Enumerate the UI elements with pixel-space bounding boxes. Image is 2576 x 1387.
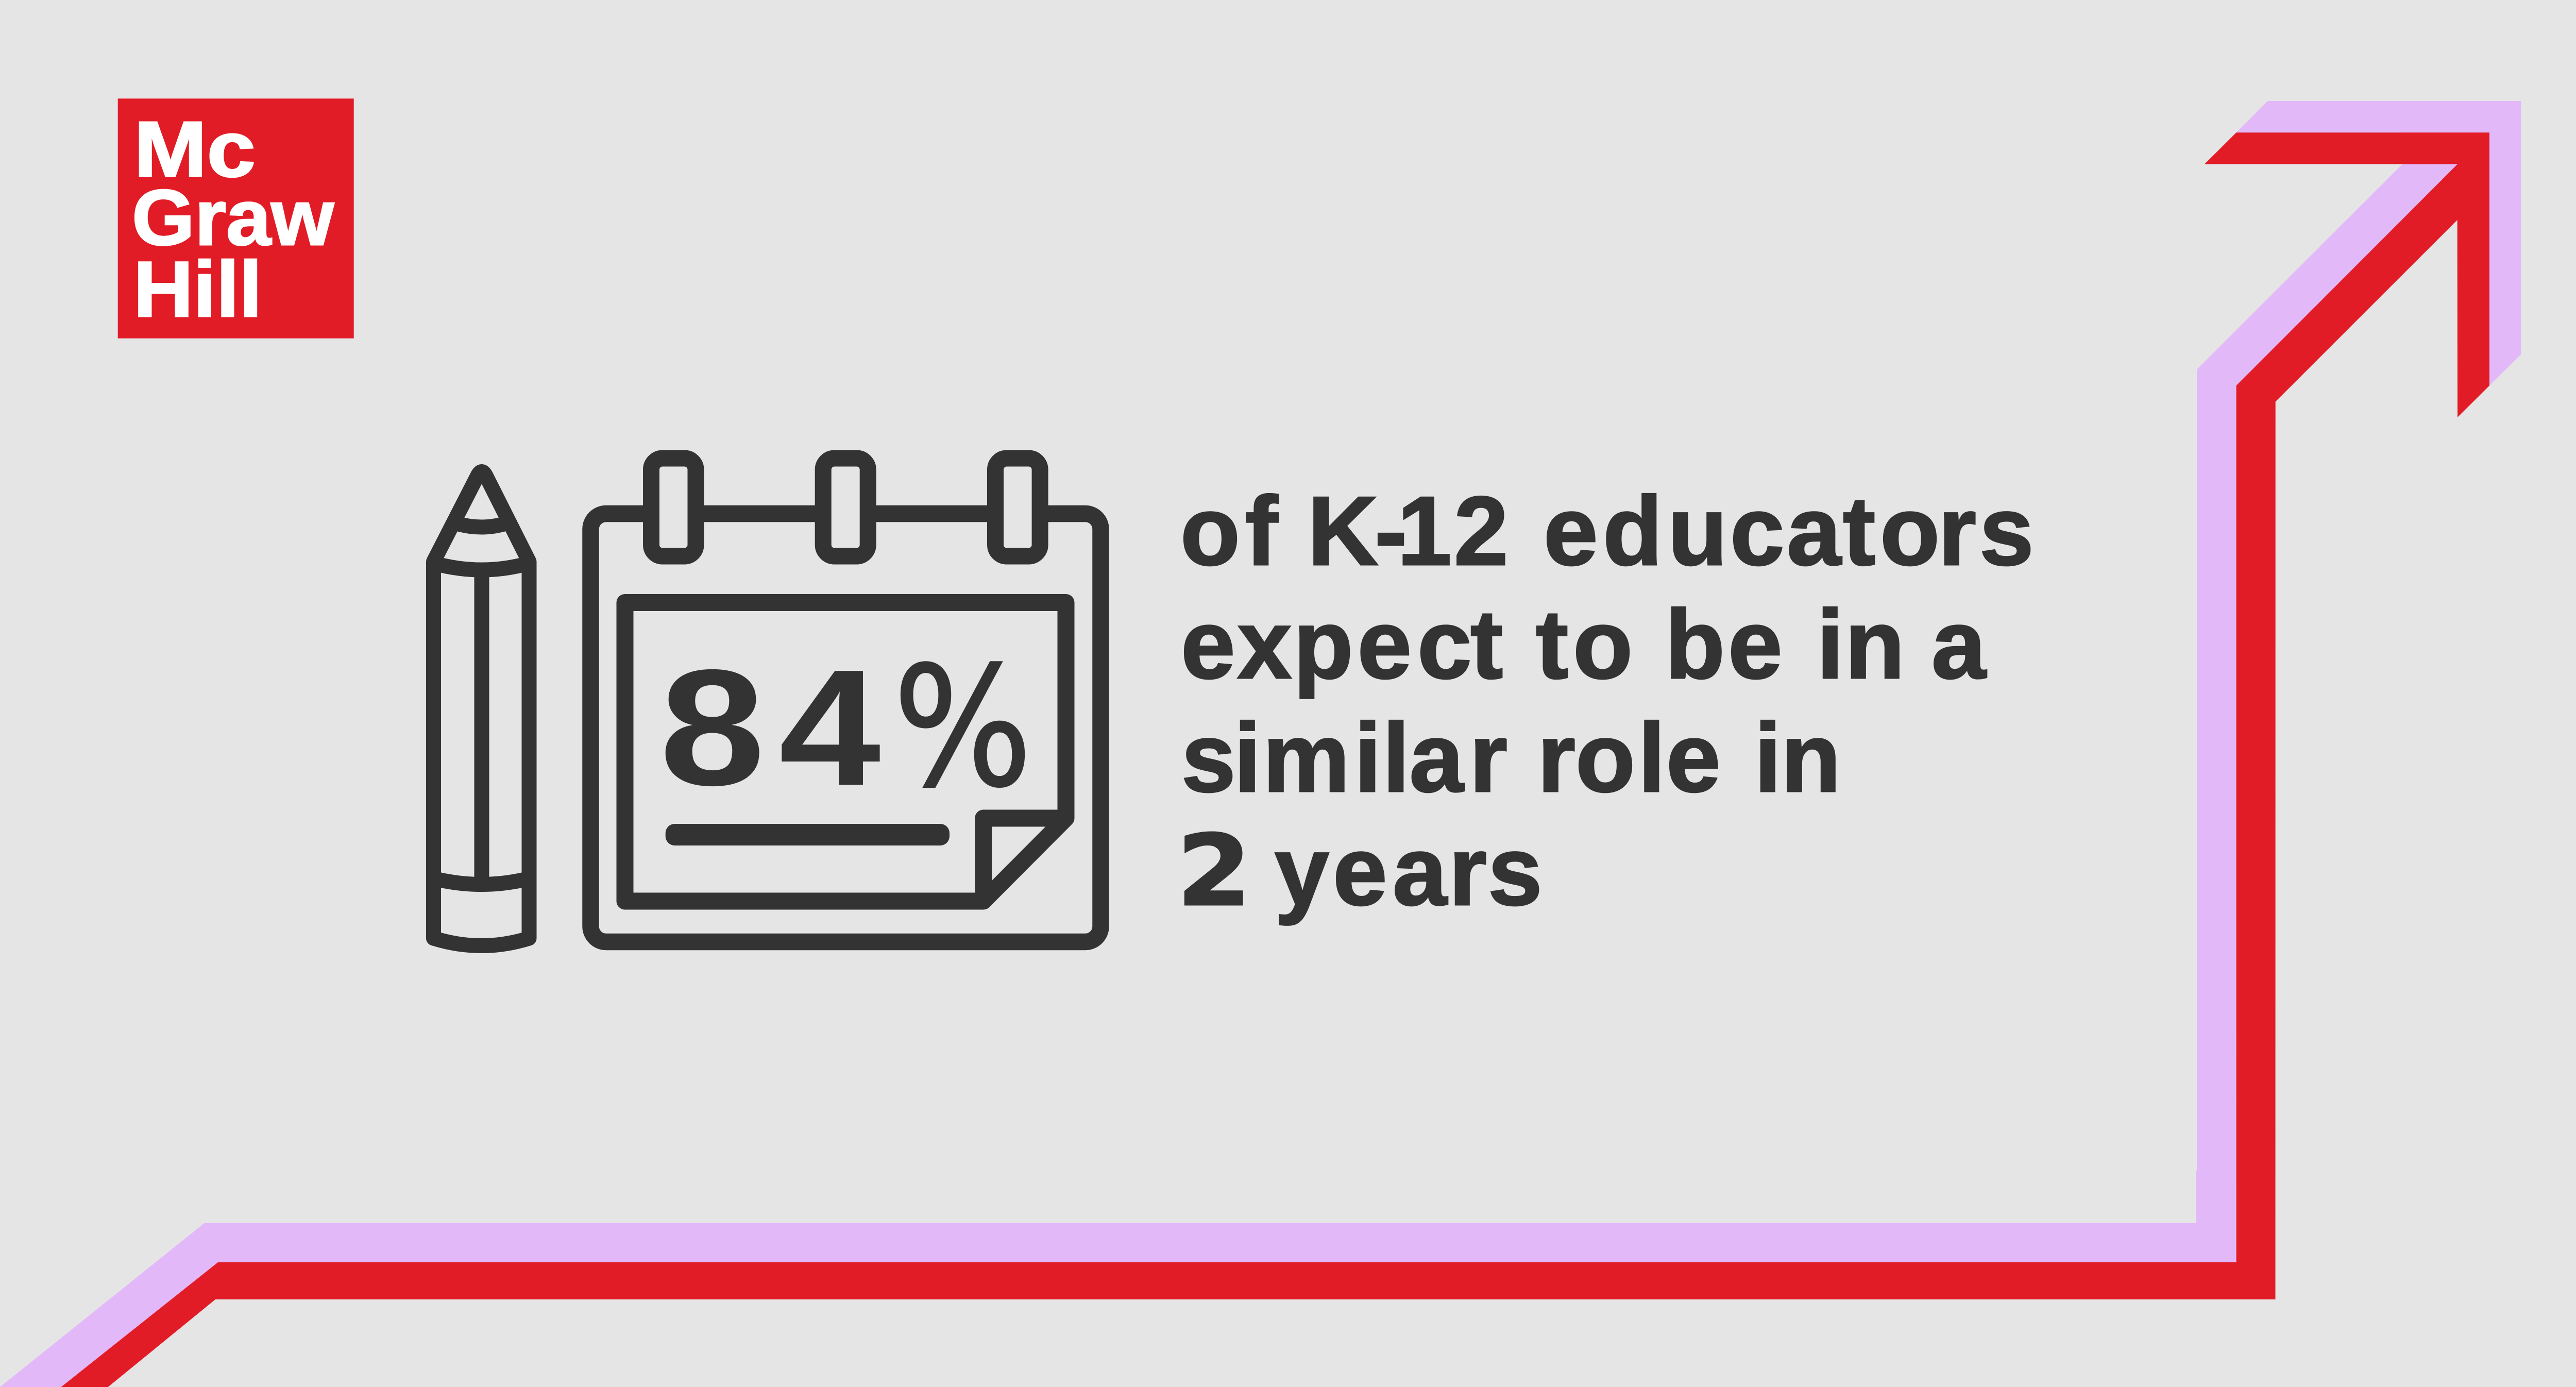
binder rings (651, 459, 1040, 556)
icon: calendar notebook (590, 459, 1100, 942)
line 3: similarrolein (1181, 703, 1841, 813)
statistic: 84% (659, 631, 1032, 824)
statistic: 84%: 4 (779, 635, 882, 820)
pencil lower arc (434, 878, 529, 884)
pencil centre line (474, 570, 489, 884)
logo wordmark (132, 105, 334, 333)
statistic: 84%: % (893, 631, 1032, 824)
line 4: 2 (1177, 814, 1251, 928)
pencil upper arc (434, 563, 529, 570)
statement text (1177, 477, 2034, 928)
logo wordmark: Graw (132, 174, 334, 262)
line 4: years (1275, 817, 1543, 926)
notebook outline (590, 514, 1100, 942)
line 1: ofK-12educators (1180, 477, 2034, 586)
logo wordmark: Hill (133, 245, 262, 333)
pencil tip arc (453, 522, 509, 527)
inner page with folded corner (625, 603, 1066, 901)
line 2: expecttobeina (1181, 590, 1987, 699)
logo: McGraw Hill (118, 98, 354, 339)
logo background (118, 98, 354, 339)
icon: pencil (434, 472, 529, 946)
statistic: 84%: 8 (659, 635, 765, 820)
pencil outline (434, 472, 529, 946)
underline bar (666, 824, 950, 845)
logo wordmark: Mc (134, 105, 256, 193)
